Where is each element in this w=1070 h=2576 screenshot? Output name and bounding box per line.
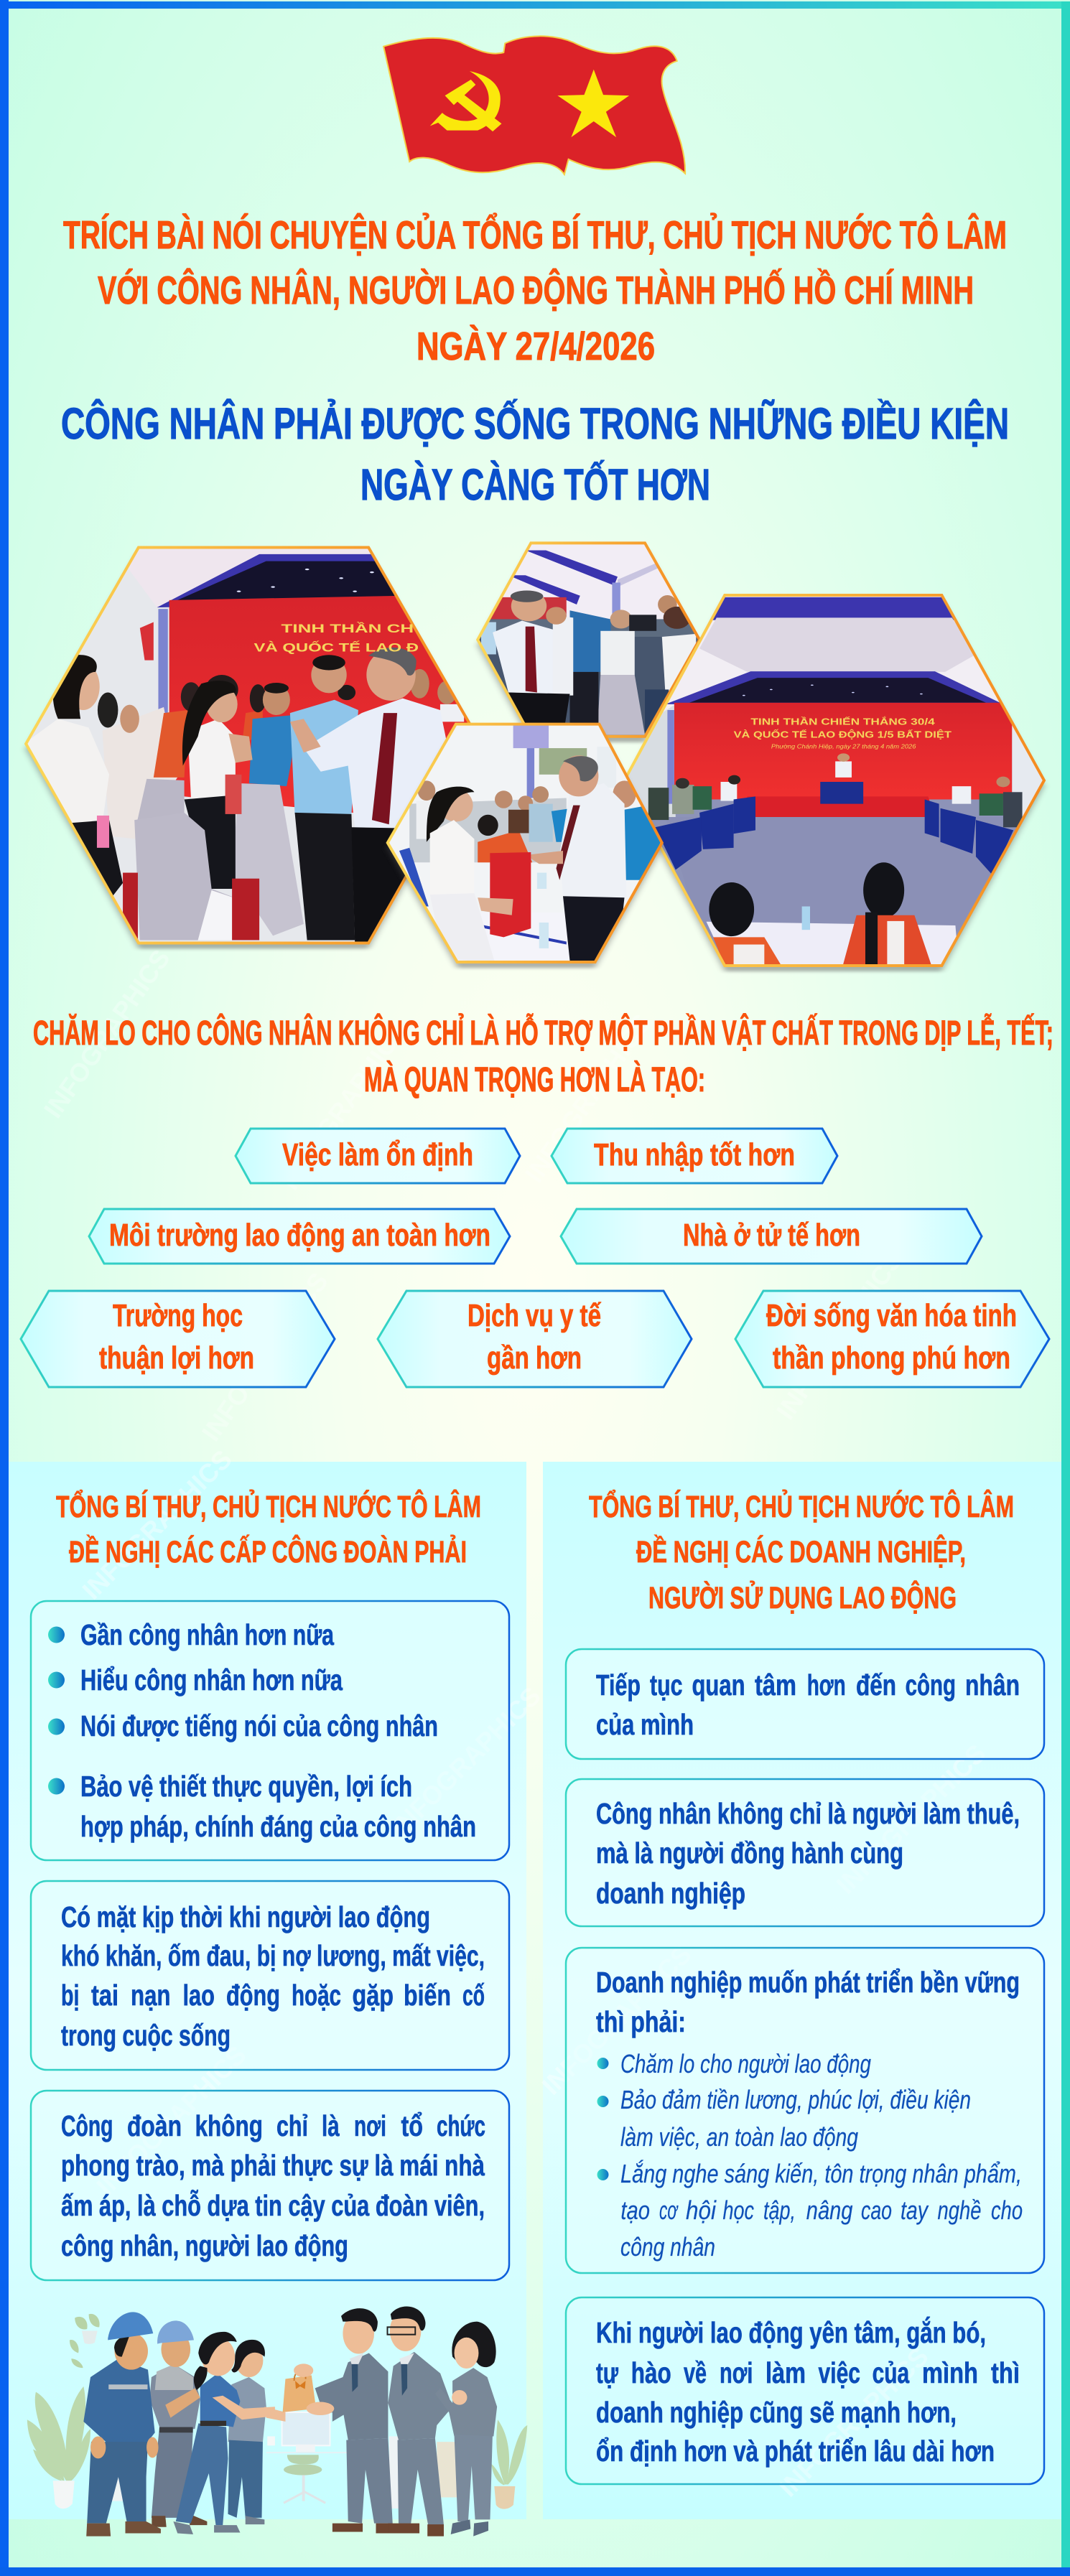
icon: party flag	[383, 36, 685, 174]
card: union as warm home: công nhân, người lao động	[61, 2229, 348, 2262]
card: union as warm home: phong trào, mà phải thực sự là mái nhà	[61, 2149, 485, 2182]
manager: man with glasses	[387, 2306, 452, 2537]
bullet: Lắng nghe sáng kiến: cho	[991, 2195, 1023, 2225]
photo: hexagon left, leader greeting workers	[26, 547, 483, 949]
card: be present in time: gặp	[352, 1979, 394, 2012]
card: be present in time: cố	[462, 1979, 485, 2012]
bullet: Bảo đảm tiền lương: làm việc, an toàn lao động	[620, 2122, 858, 2152]
card: be present in time: tai	[91, 1979, 118, 2012]
icon: yellow star	[557, 70, 629, 137]
bullet: Chăm lo cho người lao động: Chăm lo cho người lao động	[620, 2049, 871, 2078]
panel watermarks: INFOGRAPHICS	[77, 1444, 238, 1605]
photo: hexagon top middle	[478, 543, 703, 742]
card: be present in time: biến	[404, 1979, 451, 2012]
card: be present in time: lao	[182, 1979, 215, 2012]
card: stronger business: thì	[991, 2356, 1020, 2389]
card: union as warm home: nơi	[354, 2109, 386, 2142]
label: Việc làm ổn định	[236, 1129, 520, 1183]
bullet: Bảo vệ thiết thực quyền lợi	[48, 1770, 476, 1843]
card: union as warm home	[31, 2091, 509, 2280]
card: be present in time: khó khăn, ốm đau, bị nợ lương, mất việc,	[61, 1939, 485, 1972]
card: stronger business: làm	[766, 2356, 806, 2389]
heading: left panel: ĐỀ NGHỊ CÁC CẤP CÔNG ĐOÀN PHẢI	[69, 1534, 467, 1569]
heading: left panel: TỔNG BÍ THƯ, CHỦ TỊCH NƯỚC TÔ LÂM	[56, 1488, 481, 1524]
card: care for workers: tâm	[755, 1669, 796, 1702]
bullet: Nói được tiếng nói của công nhân: Nói được tiếng nói của công nhân	[80, 1709, 438, 1742]
card: care for workers: tục	[650, 1669, 682, 1702]
woman in white shirt	[182, 681, 253, 889]
card: stronger business: về	[684, 2356, 707, 2389]
card: care for workers: đến	[856, 1669, 896, 1702]
bullet: Gần công nhân hơn nữa: Gần công nhân hơn nữa	[80, 1618, 335, 1651]
watermarks: INFOGRAPHICS	[771, 1246, 908, 1425]
banner text in photo: TINH THẦN CHIẾN THẮNG 30/4	[750, 716, 936, 727]
bullet: Bảo vệ thiết thực quyền lợi: Bảo vệ thiết thực quyền, lợi ích	[80, 1770, 412, 1803]
card: stronger business: mình	[922, 2356, 978, 2389]
card: care for workers: quan	[692, 1669, 745, 1702]
photo: hexagon bottom middle, gift	[388, 724, 664, 968]
bullet: Lắng nghe sáng kiến: nghề	[938, 2195, 981, 2225]
card: care for workers	[566, 1649, 1044, 1759]
photo: hexagon right, meeting hall	[625, 595, 1048, 971]
plant: right potted	[491, 2419, 527, 2509]
paper gift bag	[283, 2371, 316, 2412]
label: Trường học thuận lợi hơn: thuận lợi hơn	[99, 1340, 254, 1376]
panel: right, enterprises	[536, 1462, 1061, 2519]
title: orange speech heading	[63, 213, 1007, 368]
illustration: workers and managers exchanging a gift	[27, 2306, 527, 2537]
card: bullet list	[31, 1601, 509, 1860]
card: union as warm home: chức	[437, 2109, 485, 2142]
card: be present in time: Có mặt kịp thời khi người lao động	[61, 1900, 430, 1933]
card: care for workers: công	[906, 1669, 956, 1702]
bullet: Bảo đảm tiền lương	[597, 2085, 971, 2152]
panel watermarks	[77, 1444, 546, 2201]
label: Dịch vụ y tế gần hơn: gần hơn	[487, 1340, 582, 1376]
man in striped shirt	[290, 655, 358, 940]
title: blue main heading: NGÀY CÀNG TỐT HƠN	[360, 460, 710, 509]
title: blue main heading	[61, 399, 1009, 509]
watermarks: INFOGRAPHICS	[38, 944, 176, 1124]
panel watermarks: INFOGRAPHICS	[773, 2341, 934, 2503]
bullet: Bảo vệ thiết thực quyền lợi: hợp pháp, chính đáng của công nhân	[80, 1810, 476, 1843]
banner text in photo: Phường Chánh Hiệp, ngày 27 tháng 4 năm 2026	[771, 743, 916, 750]
bullet: Hiểu công nhân hơn nữa	[48, 1663, 343, 1697]
panel watermarks: INFOGRAPHICS	[831, 1738, 992, 1900]
card: stronger business: hào	[631, 2356, 671, 2389]
woman with gift	[399, 787, 485, 928]
bullet: Gần công nhân hơn nữa	[48, 1618, 335, 1651]
card: stronger business: việc	[819, 2356, 860, 2389]
manager: woman	[435, 2322, 497, 2537]
chair and bags	[123, 813, 259, 940]
watermarks: INFOGRAPHICS	[519, 1009, 657, 1188]
icon: hammer and sickle	[430, 71, 501, 131]
banner text in photo	[254, 622, 419, 654]
card: stronger business: của	[873, 2356, 910, 2389]
label: Dịch vụ y tế gần hơn: Dịch vụ y tế	[467, 1298, 601, 1333]
card: workers as companions: mà là người đồng hành cùng	[596, 1837, 903, 1870]
bullet: Lắng nghe sáng kiến: cao	[861, 2195, 892, 2225]
card: stronger business	[566, 2297, 1044, 2484]
title: orange speech heading: NGÀY 27/4/2026	[417, 324, 655, 368]
bullet: Nói được tiếng nói của công nhân	[48, 1709, 438, 1742]
label: Nhà ở tử tế hơn: Nhà ở tử tế hơn	[683, 1218, 860, 1253]
bullet: Lắng nghe sáng kiến: tay	[901, 2195, 929, 2225]
watermarks: INFOGRAPHICS	[275, 1016, 413, 1195]
card: stronger business: tự	[596, 2356, 618, 2389]
banner text in photo: VÀ QUỐC TẾ LAO ĐỘNG 1/5 BẤT DIỆT	[734, 729, 952, 739]
panel watermarks	[536, 1738, 992, 2503]
bullet: Lắng nghe sáng kiến: công nhân	[620, 2232, 715, 2262]
bullet: Hiểu công nhân hơn nữa: Hiểu công nhân hơn nữa	[80, 1663, 343, 1697]
label: Việc làm ổn định: Việc làm ổn định	[282, 1137, 473, 1172]
heading: right panel	[589, 1488, 1014, 1615]
banner text in photo	[734, 716, 952, 750]
bullet: Lắng nghe sáng kiến: học	[722, 2195, 754, 2225]
red gift bag	[490, 852, 531, 937]
label: Trường học thuận lợi hơn: Trường học	[113, 1298, 243, 1333]
banner text in photo: TINH THẦN CH	[282, 622, 414, 635]
panel watermarks: INFOGRAPHICS	[91, 2040, 252, 2201]
seated delegates	[648, 775, 1023, 827]
crowd in middle	[409, 780, 572, 862]
label: Trường học thuận lợi hơn	[21, 1291, 335, 1387]
worker: second, grey helmet	[149, 2320, 207, 2527]
manager: man handing gift	[294, 2308, 393, 2534]
card: union as warm home: chỉ	[276, 2109, 308, 2142]
subheading: orange statement: MÀ QUAN TRỌNG HƠN LÀ TẠO:	[364, 1060, 705, 1099]
card: be present in time: nạn	[131, 1979, 171, 2012]
card: be present in time: trong cuộc sống	[61, 2019, 231, 2052]
label: Môi trường lao động an toàn hơn	[89, 1209, 510, 1264]
card: stronger business: nơi	[720, 2356, 753, 2389]
card: union as warm home: Công	[61, 2109, 113, 2142]
card: sustainable development: thì phải:	[596, 2005, 686, 2038]
bullet: Bảo đảm tiền lương: Bảo đảm tiền lương, phúc lợi, điều kiện	[620, 2085, 971, 2114]
card: care for workers: của mình	[596, 1708, 694, 1741]
label: Đời sống văn hóa tinh thần phong phú hơn	[735, 1291, 1049, 1387]
bullet: Lắng nghe sáng kiến: tạo	[620, 2195, 650, 2225]
bullet: Lắng nghe sáng kiến	[597, 2159, 1023, 2262]
bullet: Lắng nghe sáng kiến: nâng	[806, 2195, 852, 2225]
heading: left panel	[56, 1488, 481, 1569]
photo collage	[26, 543, 1048, 971]
worker: striped shirt woman	[228, 2340, 266, 2524]
bullet: Lắng nghe sáng kiến: cơ	[659, 2195, 679, 2225]
panel watermarks: INFOGRAPHICS	[536, 1939, 697, 2101]
panel: left, trade unions	[9, 1444, 546, 2519]
card: union as warm home: tổ	[401, 2109, 423, 2142]
card: union as warm home: ấm áp, là chỗ dựa tin cậy của đoàn viên,	[61, 2189, 485, 2222]
card: be present in time: động	[226, 1979, 280, 2012]
bullet: Lắng nghe sáng kiến: hội	[686, 2195, 717, 2225]
card: be present in time	[31, 1881, 509, 2070]
banner text in photo: VÀ QUỐC TẾ LAO Đ	[254, 640, 419, 654]
card: sustainable development	[566, 1948, 1044, 2273]
label: Thu nhập tốt hơn: Thu nhập tốt hơn	[594, 1137, 795, 1172]
card: workers as companions	[566, 1779, 1044, 1926]
leader white shirt	[290, 648, 450, 941]
bullet: Lắng nghe sáng kiến: tập,	[763, 2195, 796, 2225]
office desk and chair	[108, 2412, 461, 2509]
leader in white	[526, 755, 626, 961]
card: care for workers: hơn	[807, 1669, 846, 1702]
card: care for workers: Tiếp	[596, 1669, 641, 1702]
card: be present in time: bị	[61, 1979, 79, 2012]
label: Dịch vụ y tế gần hơn	[378, 1291, 692, 1387]
card: union as warm home: không	[195, 2109, 263, 2142]
card: union as warm home: là	[322, 2109, 340, 2142]
woman at left	[26, 655, 123, 900]
card: stronger business: doanh nghiệp cũng sẽ mạnh hơn,	[596, 2396, 957, 2429]
plant: hanging top left	[70, 2314, 100, 2368]
panel watermarks: INFOGRAPHICS	[386, 1681, 546, 1842]
watermarks	[38, 944, 908, 1447]
label: Môi trường lao động an toàn hơn: Môi trường lao động an toàn hơn	[109, 1218, 490, 1253]
card: workers as companions: doanh nghiệp	[596, 1877, 745, 1910]
card: union as warm home: đoàn	[127, 2109, 182, 2142]
subheading: orange statement	[33, 1013, 1053, 1099]
crowd in background	[98, 669, 464, 839]
label: Nhà ở tử tế hơn	[561, 1209, 982, 1264]
man in blue at right	[625, 806, 661, 880]
worker: blue polo woman	[173, 2332, 285, 2534]
watermarks: INFOGRAPHICS	[196, 1267, 334, 1447]
card: care for workers: nhân	[965, 1669, 1020, 1702]
worker: first, blue helmet	[83, 2312, 161, 2537]
plant: left potted	[27, 2386, 90, 2509]
label: Thu nhập tốt hơn	[552, 1129, 837, 1183]
card: be present in time: hoặc	[292, 1979, 341, 2012]
